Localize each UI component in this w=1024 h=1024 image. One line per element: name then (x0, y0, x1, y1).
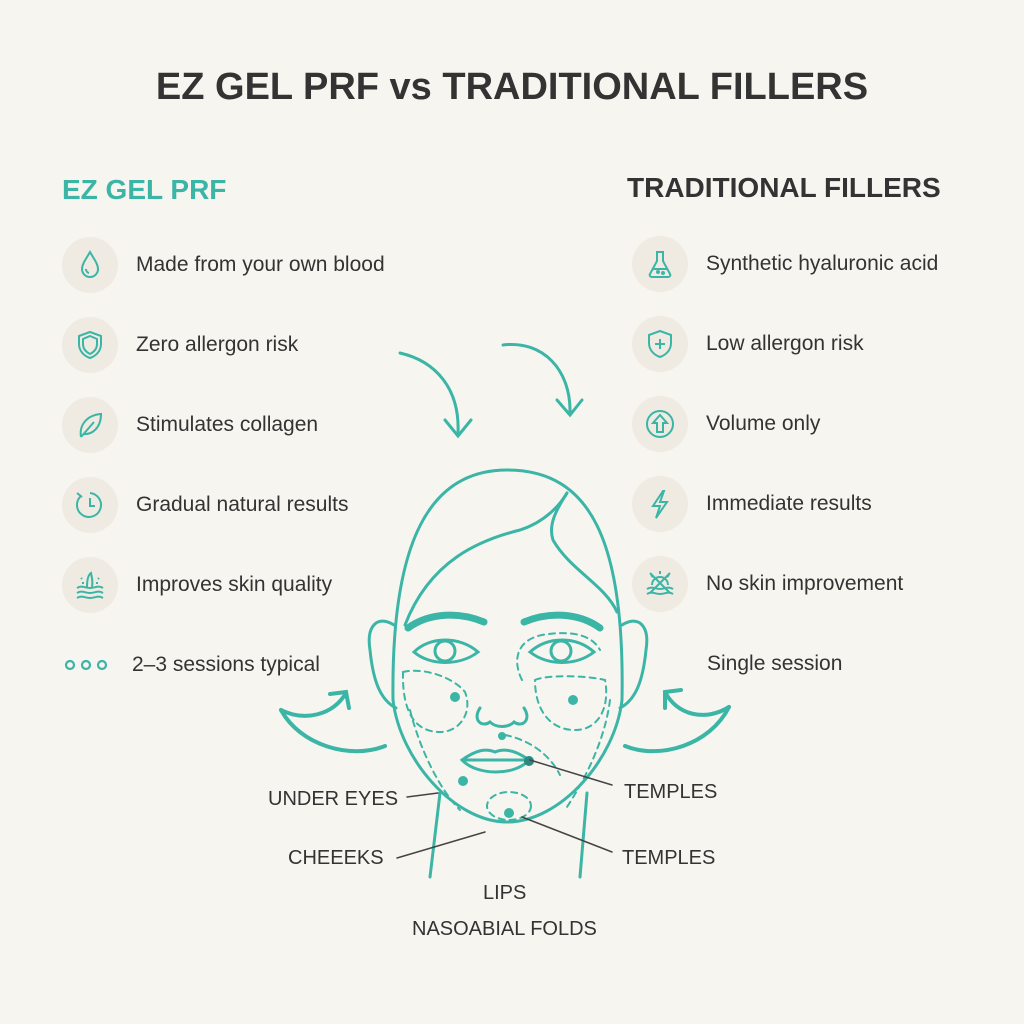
item: gradual (62, 477, 348, 533)
item: immediate: Immediate results (706, 492, 872, 515)
item: blood (62, 237, 385, 293)
heading: ez gel prf: EZ GEL PRF (62, 174, 226, 205)
item: gradual: Gradual natural results (136, 493, 348, 516)
arrow: top right (503, 344, 582, 415)
item: no skin improvement (632, 556, 904, 612)
item: single session: Single session (707, 652, 842, 675)
item: collagen: Stimulates collagen (136, 413, 318, 436)
item: sessions: 2–3 sessions typical (132, 653, 320, 676)
item: synthetic: Synthetic hyaluronic acid (706, 252, 938, 275)
panel: ez gel prf list (62, 237, 385, 676)
panel: traditional fillers list (632, 236, 938, 675)
dashed injection zones (403, 633, 610, 820)
face (369, 470, 647, 877)
label: under eyes: UNDER EYES (268, 788, 398, 810)
label: temples upper: TEMPLES (624, 781, 717, 803)
leader lines (397, 760, 612, 858)
heading: traditional fillers: TRADITIONAL FILLERS (627, 172, 941, 203)
item: skin (62, 557, 332, 613)
item: allergen (62, 317, 298, 373)
item: no skin improvement: No skin improvement (706, 572, 903, 595)
title: EZ GEL PRF vs TRADITIONAL FILLERS (156, 66, 868, 108)
item: synthetic (632, 236, 938, 292)
item: blood: Made from your own blood (136, 253, 385, 276)
item: immediate (632, 476, 872, 532)
item: volume (632, 396, 820, 452)
arrow: right side (625, 690, 729, 751)
label: lips: LIPS (483, 882, 526, 904)
item: low allergen: Low allergon risk (706, 332, 864, 355)
item: volume: Volume only (706, 412, 820, 435)
arrow: left side (281, 692, 385, 751)
label: cheeks: CHEEEKS (288, 847, 384, 869)
label: temples lower: TEMPLES (622, 847, 715, 869)
arrow: top left (400, 353, 471, 436)
item: skin: Improves skin quality (136, 573, 332, 596)
item: low allergen (632, 316, 864, 372)
dots (450, 692, 578, 818)
item: allergen: Zero allergon risk (136, 333, 298, 356)
label: nasolabial folds: NASOABIAL FOLDS (412, 918, 597, 940)
item: collagen (62, 397, 318, 453)
